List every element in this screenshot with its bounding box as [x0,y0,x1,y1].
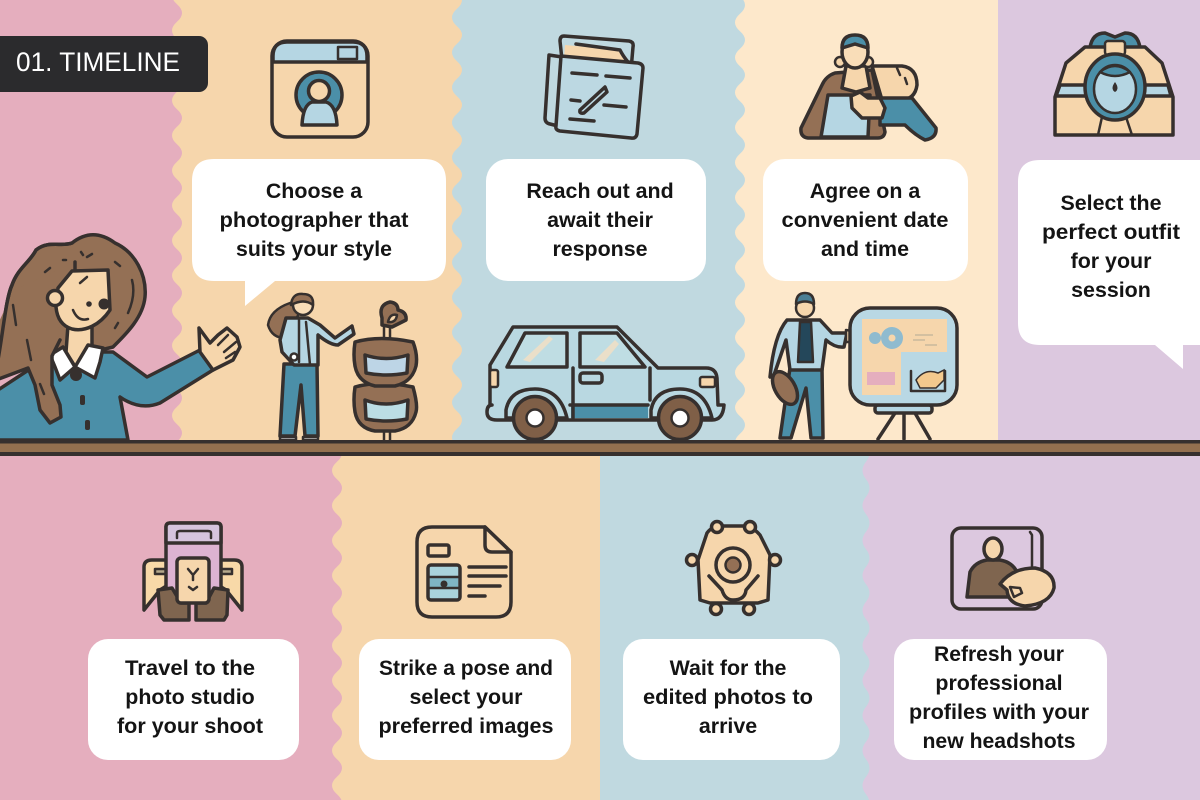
callout: select the outfit [1018,160,1200,369]
callout: agree on a date: Agree on a [810,179,921,203]
icon: studio phone with hands [144,523,242,620]
callout: refresh your profiles: profiles with your [909,700,1089,724]
callout: select the outfit: perfect outfit [1042,220,1180,244]
callout: choose a photographer [192,159,446,306]
callout: strike a pose: preferred images [378,714,554,738]
callout: travel to the studio: Travel to the [125,656,255,680]
callout: reach out [486,159,706,281]
callout: strike a pose [359,639,571,760]
panel: bottom lavender background [862,444,1200,800]
icon: retouching outline [686,522,780,614]
callout: select the outfit: Select the [1060,191,1162,215]
panel: top lavender background [998,0,1200,445]
callout: reach out: response [552,237,648,261]
callout: refresh your profiles: new headshots [922,729,1076,753]
callout: wait for the photos: arrive [699,714,757,738]
callout: wait for the photos: edited photos to [643,685,813,709]
panel: bottom peach background [332,444,1200,800]
callout: travel to the studio: photo studio [125,685,255,709]
icon: camera dome [1055,33,1173,135]
panel: bottom blue background [600,450,1200,800]
callout: refresh your profiles: Refresh your [934,642,1064,666]
panel: top pink background [0,0,1200,445]
callout: reach out: await their [547,208,653,232]
panel: top peach background [172,0,1200,459]
callout: strike a pose: Strike a pose and [379,656,553,680]
title badge: 01. TIMELINE [16,47,180,77]
callout: reach out: Reach out and [526,179,674,203]
illustration: stacked camera bags [354,302,417,440]
callout: agree on a date: convenient date [782,208,949,232]
callout: strike a pose: select your [410,685,522,709]
illustration: small woman with camera [268,294,354,440]
illustration: presentation board [850,308,957,439]
callout: select the outfit: session [1071,278,1151,302]
callout: agree on a date: and time [821,237,909,261]
callout: agree on a date [763,159,968,281]
icon: documents and pen [545,36,643,138]
callout: refresh your profiles: professional [935,671,1063,695]
illustration: man presenting [767,293,865,438]
illustration: woman presenter [0,235,240,440]
callout: refresh your profiles [894,639,1107,760]
title badge [0,36,208,92]
icon: document with photo [417,527,511,617]
callout: wait for the photos: Wait for the [670,656,787,680]
callout: wait for the photos [623,639,840,760]
callout: choose a photographer: photographer that [220,208,408,232]
panel: bottom pink background [0,450,1200,800]
callout: select the outfit: for your [1071,249,1151,273]
callout: travel to the studio [88,639,299,760]
icon: person with thumbs up [801,35,936,140]
callout: travel to the studio: for your shoot [117,714,263,738]
icon: photographer profile window [272,41,368,137]
illustration: car [487,327,724,440]
panel: top blue background [452,0,1200,464]
callout: choose a photographer: Choose a [266,179,363,203]
callout: choose a photographer: suits your style [236,237,392,261]
ground line [0,440,1200,456]
panel: top light peach background [735,0,1200,451]
icon: headshot with hand [952,528,1054,609]
